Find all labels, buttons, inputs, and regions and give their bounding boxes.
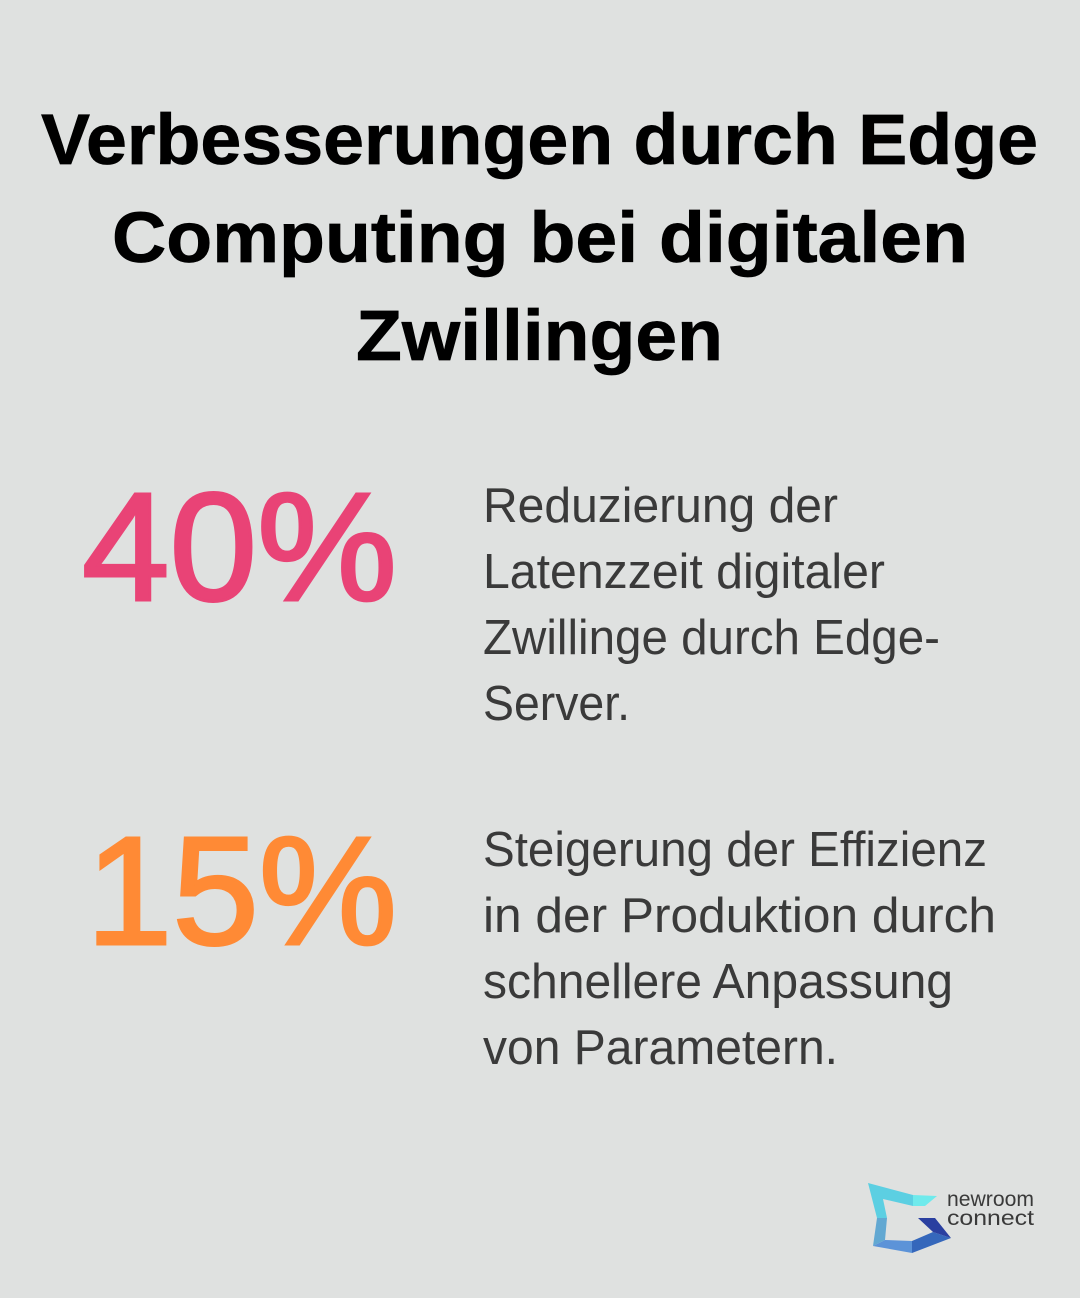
- logo: newroom connect: [868, 1183, 1034, 1253]
- text: 40% description: Reduzierung der: [483, 479, 838, 533]
- text: 15% description: in der Produktion durch: [483, 889, 996, 943]
- statistic: 15%: 15%: [86, 805, 397, 977]
- title: Verbesserungen durch Edge: [41, 101, 1038, 180]
- text: 15% description: [483, 823, 996, 1075]
- title: [41, 101, 1038, 376]
- statistic: 40%: 40%: [82, 461, 397, 633]
- title: Computing bei digitalen: [112, 199, 968, 278]
- text: 15% description: schnellere Anpassung: [483, 955, 953, 1009]
- text: 40% description: Zwillinge durch Edge-: [483, 611, 940, 665]
- text: 15% description: Steigerung der Effizienz: [483, 823, 987, 877]
- text: 40% description: Server.: [483, 677, 630, 731]
- text: wordmark: connect: [947, 1207, 1034, 1230]
- text: 40% description: Latenzzeit digitaler: [483, 545, 885, 599]
- text: wordmark: newroom: [947, 1188, 1034, 1211]
- text: 15% description: von Parametern.: [483, 1021, 838, 1075]
- text: 40% description: [483, 479, 940, 731]
- text: wordmark: [947, 1188, 1034, 1230]
- title: Zwillingen: [356, 297, 723, 376]
- icon: logo mark: [868, 1183, 951, 1253]
